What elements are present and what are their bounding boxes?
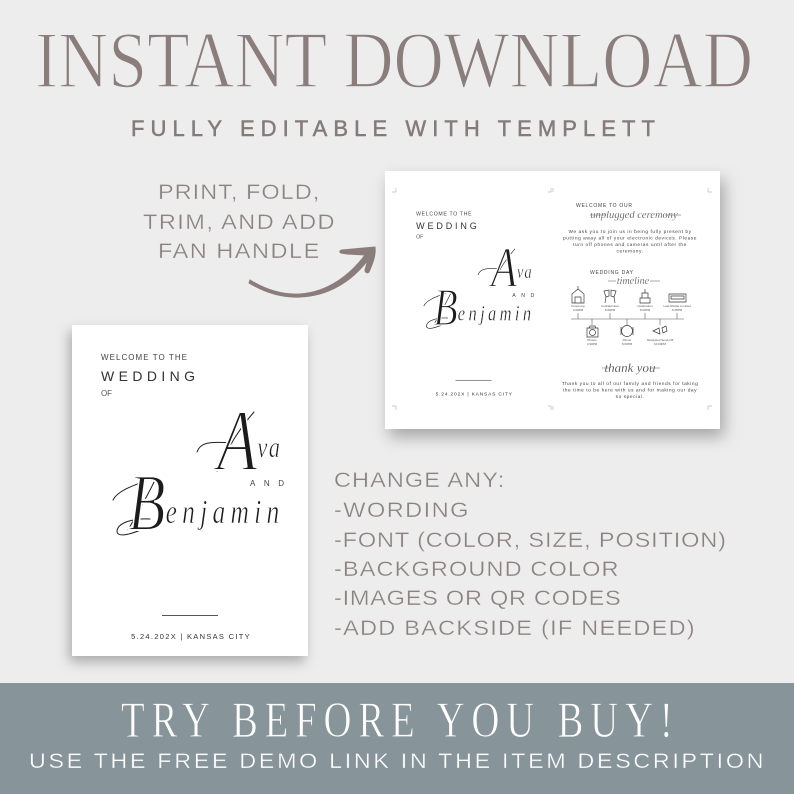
text block: change any list: -WORDING (334, 498, 468, 522)
welcome text: WELCOME TO THE (101, 353, 187, 362)
back: timeline: Photos (587, 338, 597, 342)
names: enjamin (166, 492, 284, 531)
text block: change any list: -ADD BACKSIDE (IF NEEDED) (334, 616, 695, 640)
back: timeline (571, 270, 691, 346)
back: timeline: 4:30PM (587, 342, 598, 346)
welcome text: OF (101, 389, 112, 398)
icon: glasses (604, 290, 616, 303)
text block: print instructions: TRIM, AND ADD (143, 210, 335, 234)
arrow (249, 247, 375, 297)
names: A (217, 392, 257, 489)
front face of fan: 5.24.202X | KANSAS CITY (436, 391, 513, 397)
back: thank you: so special. (616, 394, 644, 400)
back: timeline: timeline (617, 276, 650, 287)
back: thank you (562, 360, 698, 400)
names: AND (250, 479, 284, 488)
back: unplugged ceremony: ceremony. (616, 248, 644, 254)
back: thank you: the time to be here with us and for making our day (563, 388, 697, 394)
back: timeline: 5:00PM (605, 308, 616, 312)
icon: plate (622, 326, 632, 336)
back: timeline: Ceremony (571, 304, 585, 308)
text block: change any list: -FONT (COLOR, SIZE, POSITION) (334, 528, 726, 552)
icon: hearts (653, 326, 667, 334)
icon: shuttle bus (669, 294, 686, 302)
icon: cake (640, 289, 650, 303)
back: timeline: 10:00PM (654, 342, 667, 346)
back: thank you: thank you (605, 360, 656, 375)
back: timeline: 4:00PM (573, 308, 584, 312)
back: timeline: Cocktail Hour (601, 304, 619, 308)
text block: print instructions: PRINT, FOLD, (158, 180, 319, 204)
crop marks (392, 188, 712, 410)
subtitle: FULLY EDITABLE WITH TEMPLETT (131, 116, 655, 141)
front face of fan: A (491, 236, 517, 299)
back: timeline: Last Shuttle to Hotel (663, 304, 691, 308)
welcome text: WEDDING (101, 368, 195, 384)
back: unplugged ceremony: putting away all of your electronic devices. Please (563, 236, 697, 242)
panel: left front card (72, 325, 308, 656)
front face of fan: WELCOME TO THE (416, 212, 472, 218)
text block: print instructions (143, 180, 335, 263)
front face of fan (416, 212, 534, 397)
icon: church (572, 286, 584, 303)
banner heading: TRY BEFORE YOU BUY! (121, 692, 673, 748)
back: timeline: WEDDING DAY (590, 270, 634, 276)
front face of fan: AND (512, 293, 534, 299)
panel: bottom banner (0, 683, 794, 794)
back: unplugged ceremony: turn off phones and cameras until after the (573, 242, 687, 248)
text block: change any list: CHANGE ANY: (334, 468, 504, 492)
front face of fan: enjamin (458, 303, 534, 326)
front face of fan: va (517, 261, 533, 283)
names (113, 392, 284, 548)
text block: change any list: -IMAGES OR QR CODES (334, 586, 621, 610)
back: thank you: Thank you to all of our family and friends for taking (562, 381, 698, 387)
back: unplugged ceremony (563, 203, 697, 254)
text block: change any list (334, 468, 726, 640)
welcome text (101, 353, 195, 398)
back: unplugged ceremony: We ask you to join us in being fully present by (568, 229, 692, 235)
date and place (131, 615, 251, 641)
panel: right fan card (385, 171, 720, 429)
front face of fan: B (434, 279, 458, 338)
banner subheading: USE THE FREE DEMO LINK IN THE ITEM DESCRIPTION (29, 749, 763, 773)
back: timeline: 6:00PM (622, 342, 633, 346)
back: timeline: 6:00PM (640, 308, 651, 312)
back: unplugged ceremony: unplugged ceremony (590, 210, 678, 221)
names: B (128, 456, 166, 548)
back: timeline: Dinner (623, 338, 631, 342)
text block: change any list: -BACKGROUND COLOR (334, 557, 618, 581)
front face of fan: WEDDING (416, 221, 477, 231)
text block: print instructions: FAN HANDLE (158, 239, 319, 263)
back: timeline: 9:45PM (672, 308, 683, 312)
front face of fan: OF (416, 235, 423, 241)
names: va (257, 430, 282, 464)
back: timeline: Celebration (637, 304, 653, 308)
back: timeline: Newlywed Send-Off (647, 338, 673, 342)
icon: camera (587, 326, 598, 337)
date and place: 5.24.202X | KANSAS CITY (131, 632, 251, 641)
back: unplugged ceremony: WELCOME TO OUR (576, 203, 632, 209)
